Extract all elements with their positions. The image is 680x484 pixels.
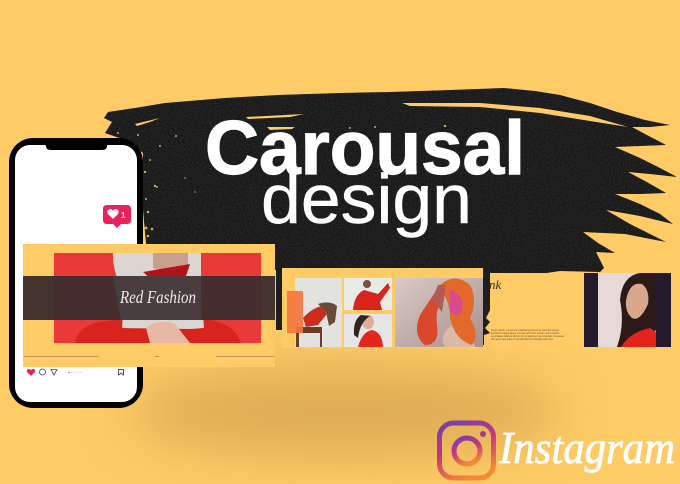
floor shadow <box>130 368 560 456</box>
small body text: incididunt magna aliqua. Ut enim ad minim veniam, quis nostrud <box>491 332 559 335</box>
translucent title band <box>23 276 275 320</box>
portrait photo <box>584 273 671 347</box>
title: design: design <box>261 160 472 238</box>
gold speckles <box>117 125 446 237</box>
icon: like notification: 1 <box>121 211 126 220</box>
Instagram logo icon <box>440 423 494 478</box>
black paint brush stroke <box>104 88 677 345</box>
carousel slide: photo collage <box>282 268 483 348</box>
photo: red hair woman <box>395 278 483 347</box>
slide title: Red Fashion <box>119 287 196 307</box>
title: Carousal: Carousal <box>205 106 525 191</box>
photo: woman in red jacket <box>344 278 392 310</box>
photo: seated woman <box>295 278 342 347</box>
small body text: duis aute irure dolor in reprehenderit in voluptate velit esse <box>491 338 554 341</box>
carousel slide: Red Fashion <box>23 244 275 367</box>
phone mockup <box>9 138 143 408</box>
icon: like notification <box>103 205 131 228</box>
carousel slide: text and portrait <box>489 273 671 348</box>
divider lines <box>24 356 275 358</box>
small body text: Lorem ipsum, consectetur adipiscing elit sed do eiusmod tempor <box>491 329 559 332</box>
photo: woman with ponytail <box>344 314 392 347</box>
small body text: exercitation ullamco laboris nisi ut aliquip ex ea commodo consequat <box>491 335 564 338</box>
gold streaks in the paint <box>135 103 628 130</box>
script heading fragment: nk <box>489 277 502 292</box>
small body text <box>491 329 564 341</box>
icon row: like, comment, share, dots, save <box>27 369 124 376</box>
red fashion photo <box>54 253 261 343</box>
orange overlay block <box>287 291 303 333</box>
